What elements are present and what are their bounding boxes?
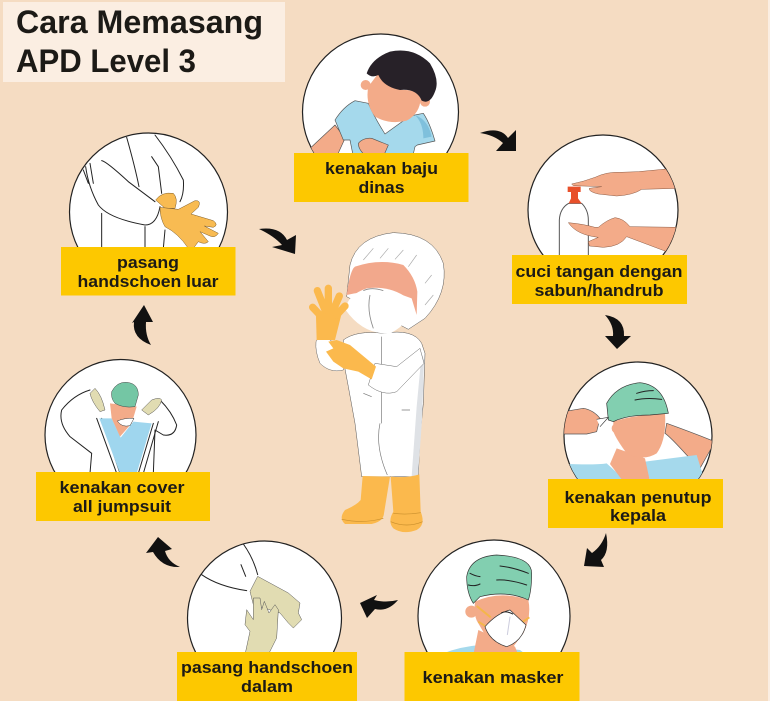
arrow 6 [132, 305, 153, 345]
raised sleeve [316, 337, 347, 371]
hood folds [363, 248, 433, 305]
illustration: outer glove [68, 132, 228, 247]
step 1: kenakan baju dinas [294, 34, 468, 202]
boot soles [342, 513, 423, 525]
step 4: kenakan masker [404, 540, 580, 701]
label [61, 247, 236, 296]
arrow 2 [605, 315, 631, 349]
label [512, 255, 687, 304]
raised glove [313, 288, 345, 340]
title panel: APD Level 3 [16, 43, 196, 79]
label: kenakan penutup [564, 488, 712, 507]
label [177, 652, 357, 701]
label: kenakan cover [60, 478, 185, 497]
label: pasang [117, 253, 179, 272]
label: kenakan masker [422, 668, 564, 687]
forearm sleeve [368, 348, 424, 393]
illustration: jumpsuit being zipped [44, 358, 197, 472]
title panel: Cara Memasang [16, 4, 263, 40]
step 6: kenakan cover all jumpsuit [36, 360, 210, 521]
label: all jumpsuit [73, 497, 171, 516]
label [294, 153, 468, 202]
label [548, 479, 723, 528]
label [404, 652, 580, 701]
left boot [342, 476, 390, 524]
suit shadow [412, 353, 424, 476]
step 7: pasang handschoen luar [61, 133, 236, 296]
label: dinas [358, 178, 404, 197]
label: pasang handschoen [181, 658, 353, 677]
hood [347, 233, 444, 329]
right edge strip [768, 0, 770, 701]
arrow 4 [360, 595, 398, 618]
illustration: inner gloves [186, 540, 342, 652]
label: cuci tangan dengan [516, 262, 682, 281]
illustration: person putting on scrubs [302, 33, 460, 153]
right boot [390, 474, 423, 532]
title panel [3, 2, 285, 82]
arrow 1 [480, 130, 516, 151]
mask [346, 288, 412, 333]
gripping glove [326, 340, 376, 379]
label: sabun/handrub [534, 281, 664, 300]
arrow 5 [146, 537, 180, 567]
central figure in full PPE [313, 233, 444, 532]
arrow 3 [584, 533, 607, 567]
label: kenakan baju [325, 159, 438, 178]
illustration: tying head cover [563, 361, 713, 479]
mask detail [363, 289, 383, 328]
step 2: cuci tangan [512, 135, 687, 304]
body [343, 332, 425, 477]
step 3: kenakan penutup kepala [548, 362, 723, 528]
label: handschoen luar [78, 272, 219, 291]
face band [347, 262, 417, 315]
illustration: putting on mask [417, 539, 571, 652]
step 5: pasang handschoen dalam [177, 541, 357, 701]
illustration: hands and soap bottle [527, 134, 679, 255]
suit creases [363, 337, 410, 475]
arrow 7 [259, 228, 296, 254]
label: kepala [610, 506, 667, 525]
label [36, 472, 210, 521]
label: dalam [241, 677, 293, 696]
